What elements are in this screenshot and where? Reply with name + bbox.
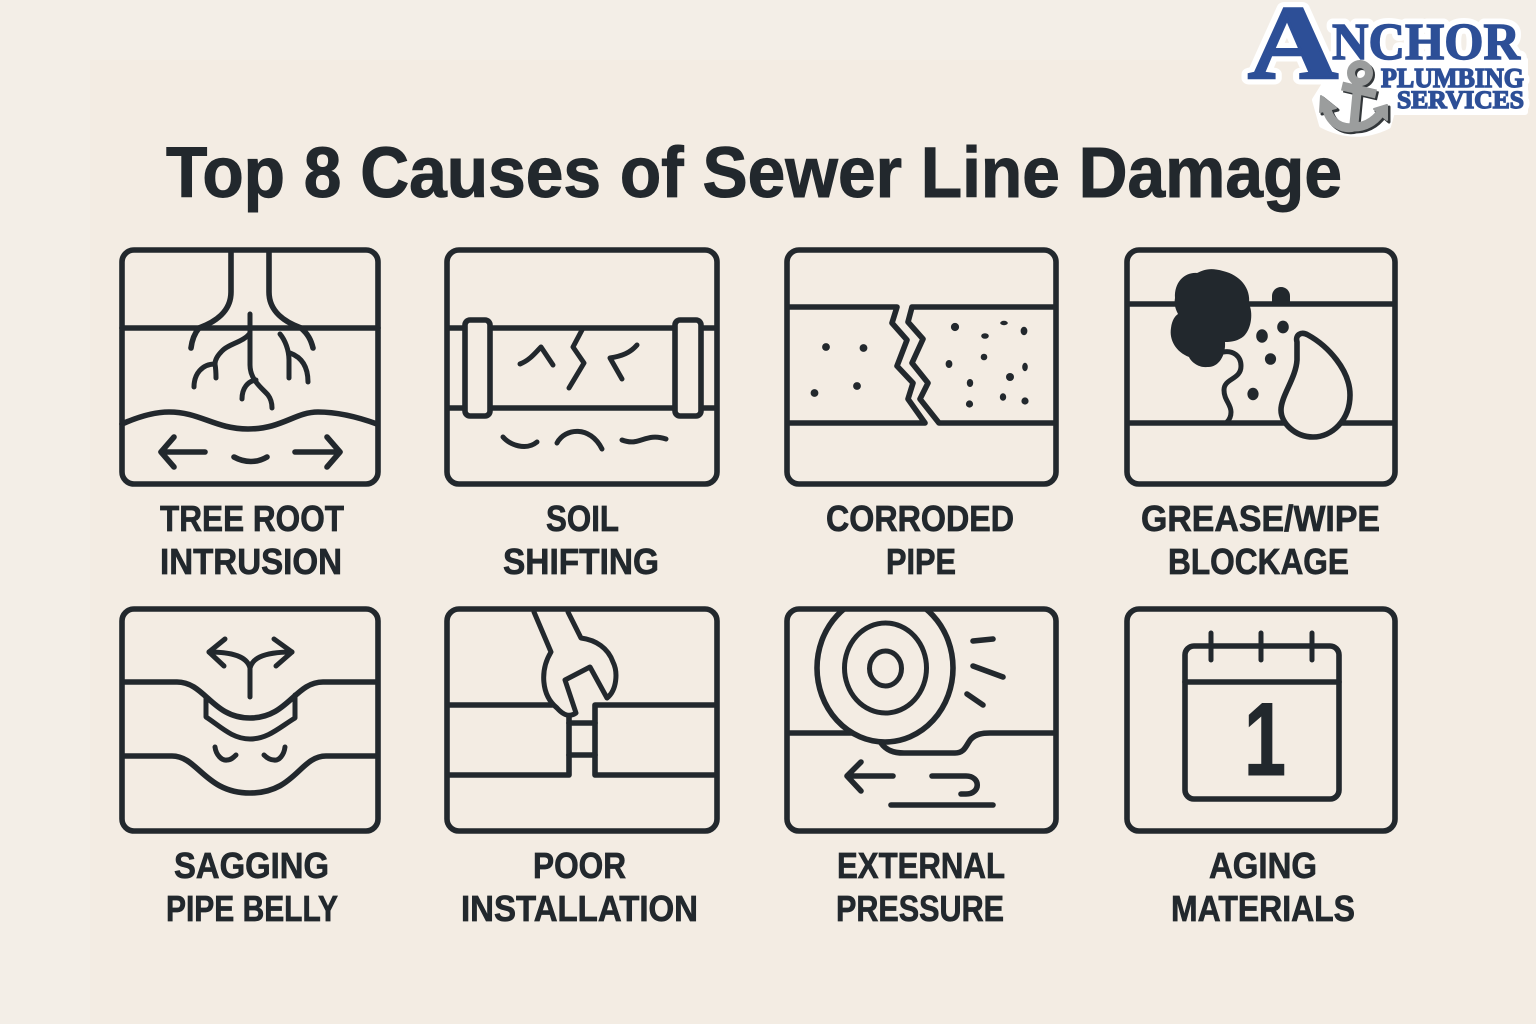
panel: soil shifting: [447, 250, 717, 582]
label: [503, 498, 659, 582]
icon: calendar: 1: [1244, 682, 1286, 798]
logo: Anchor Plumbing Services: SERVICES: [1397, 87, 1524, 114]
icon: wrench on misaligned pipe: [447, 609, 717, 831]
icon: broken corroded pipe: [787, 250, 1056, 484]
label: PIPE BELLY: [166, 888, 338, 929]
label: TREE ROOT: [160, 498, 344, 539]
panel: poor installation: [447, 609, 717, 929]
label: [160, 498, 344, 582]
label: [826, 498, 1014, 582]
label: [461, 845, 698, 929]
title: Top 8 Causes of Sewer Line Damage: [166, 134, 1342, 213]
logo: Anchor Plumbing Services: PLUMBING: [1381, 63, 1524, 93]
icon: tree roots and soil: [122, 250, 378, 484]
label: BLOCKAGE: [1168, 541, 1349, 582]
icon: calendar: [1127, 609, 1395, 831]
label: [836, 845, 1005, 929]
panel: aging materials: [1127, 609, 1395, 929]
corrosion specks: [811, 321, 1029, 408]
label: INTRUSION: [160, 541, 342, 582]
label: PIPE: [886, 541, 956, 582]
label: SAGGING: [174, 845, 329, 886]
label: [1141, 498, 1380, 582]
icon: anchor: [1320, 64, 1389, 130]
logo: Anchor Plumbing Services: NCHOR: [1332, 14, 1521, 71]
label: MATERIALS: [1171, 888, 1355, 929]
panel: external pressure: [787, 594, 1056, 929]
logo: Anchor Plumbing Services: NCHOR: [1332, 14, 1521, 71]
logo: Anchor Plumbing Services: PLUMBING: [1381, 63, 1524, 93]
label: INSTALLATION: [461, 888, 698, 929]
label: EXTERNAL: [837, 845, 1005, 886]
icon: sagging pipe: [122, 609, 378, 831]
icon: grease blob and wipe: [1127, 250, 1395, 484]
panel: grease / wipe blockage: [1127, 250, 1395, 582]
icon: wheel pressing on pipe: [787, 594, 1056, 831]
panel: sagging pipe belly: [122, 609, 378, 929]
label: PRESSURE: [836, 888, 1004, 929]
label: SOIL: [546, 498, 619, 539]
panel: tree root intrusion: [122, 250, 378, 582]
icon: cracked pipe in shifting soil: [447, 250, 717, 484]
label: CORRODED: [826, 498, 1014, 539]
logo: Anchor Plumbing Services: [1248, 0, 1525, 134]
panel: corroded pipe: [787, 250, 1056, 582]
label: [1171, 845, 1355, 929]
label: SHIFTING: [503, 541, 659, 582]
label: AGING: [1209, 845, 1317, 886]
label: POOR: [533, 845, 626, 886]
logo: Anchor Plumbing Services: SERVICES: [1397, 87, 1524, 114]
label: [166, 845, 338, 929]
label: GREASE/WIPE: [1141, 498, 1380, 539]
